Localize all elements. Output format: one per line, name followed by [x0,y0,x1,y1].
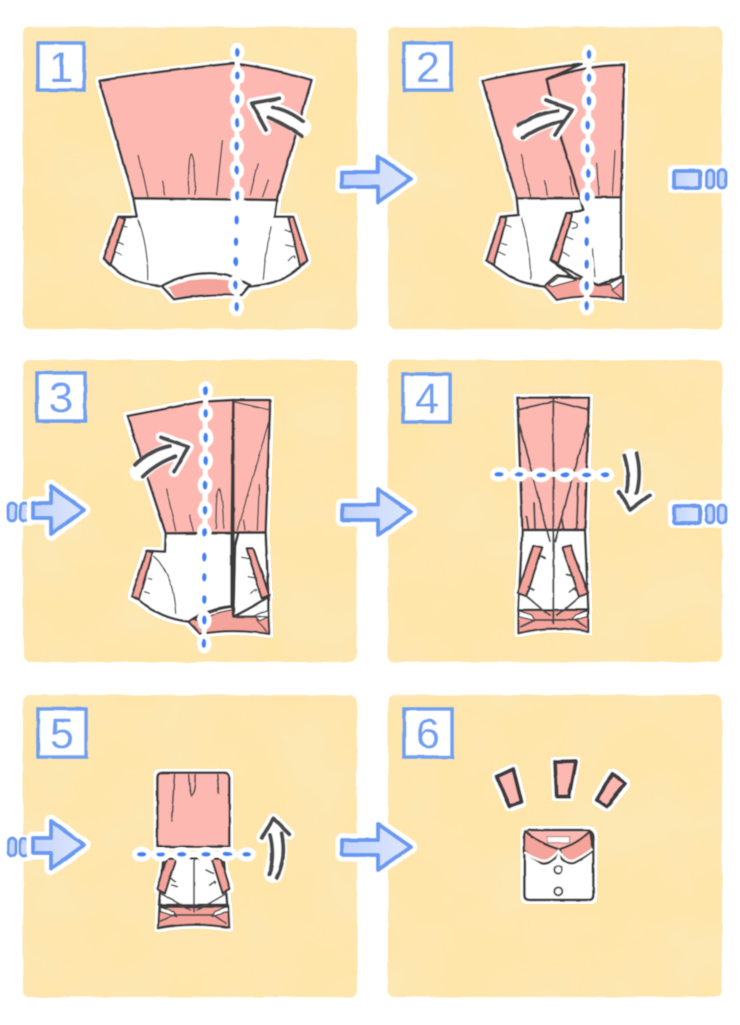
fold line: step 1 [233,48,303,311]
cuffs [132,548,269,599]
number badge 3: 3 [49,374,73,422]
panel: step 3 left side fold [127,400,270,634]
number badge 1 [38,43,84,92]
pleats and creases [145,402,270,632]
panel: step 1 shirt unfolded [99,63,312,299]
arrow: step 1 to 2 [342,156,411,202]
curved arrow [252,98,303,136]
number badge 6 [404,709,452,758]
cuffs [487,213,572,265]
skirt [99,63,312,200]
neck label [547,837,570,843]
collar [162,273,250,299]
skirt column [517,398,589,530]
collar band [158,907,229,928]
folded strip [233,400,270,533]
collar [544,275,623,300]
fold line: step 5 [137,818,289,878]
back body [487,198,583,286]
shirt body and sleeves [103,198,307,287]
curved arrow [518,100,572,138]
panel: step 6 finished shirt [497,761,626,900]
collar trim [525,849,592,861]
curved arrow [262,818,289,878]
arrow stub: row 2 exit [668,500,730,528]
number badge 2 [404,43,451,92]
arrow stub: row 1 exit [668,165,730,193]
panel: step 2 right side folded [482,64,624,300]
arrow: row 2 entry [4,486,84,534]
number badge 3 [37,373,85,422]
number badge 2: 2 [416,44,440,92]
buttons [554,866,562,895]
panel: step 4 narrow column [517,398,589,633]
pleats and creases [498,151,622,298]
exclamation strokes [497,761,626,807]
body [518,530,588,610]
cuffs [518,545,588,597]
collar band [518,610,588,633]
lower part [159,858,227,905]
fold line: step 3 [135,386,208,648]
skirt [127,400,233,533]
number badge 6: 6 [416,710,440,758]
number badge 4: 4 [415,375,439,423]
body [132,533,232,622]
collar [188,606,269,634]
folded body [551,197,621,285]
arrow: step 5 to 6 [342,824,411,870]
arrow: row 3 entry [4,821,84,869]
fold line: step 2 [518,50,591,310]
number badge 1: 1 [49,44,73,92]
number badge 4 [403,374,450,423]
curved arrow [619,453,650,510]
pleats and creases [161,775,227,923]
number badge 5: 5 [50,710,74,758]
back skirt [482,64,582,198]
folded-up skirt [157,773,229,847]
curved arrow [135,437,188,477]
collar back [526,832,591,848]
collar [524,831,558,864]
fold creases [517,398,589,623]
folded skirt flap [547,65,624,197]
cuffs [103,217,307,266]
pleats and creases [115,141,295,279]
panel: step 5 folded in half [157,773,230,928]
arrow: step 3 to 4 [342,489,411,535]
right body [233,533,268,617]
number badge 5 [38,709,86,758]
fold line: step 4 [494,453,650,510]
cuffs [157,858,230,893]
folded shirt [524,830,594,900]
